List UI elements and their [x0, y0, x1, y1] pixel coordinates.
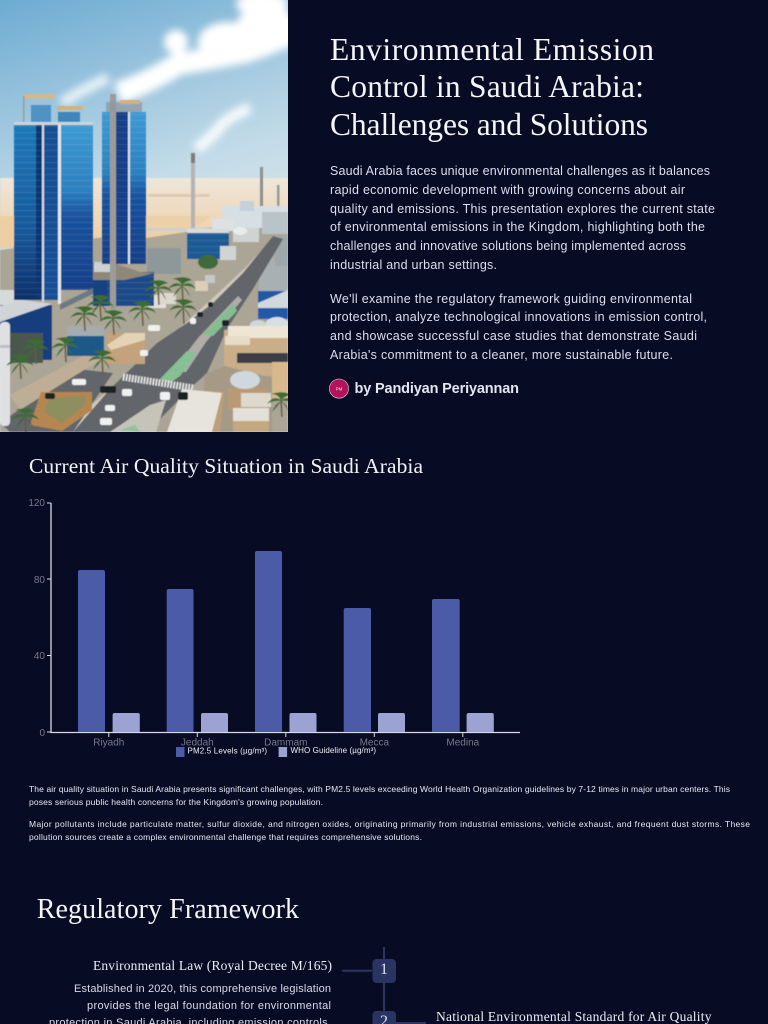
second paragraph: protection, analyze technological innovations in emission control, — [330, 310, 707, 324]
section heading: regulatory framework: Regulatory Framework — [37, 894, 299, 925]
step 1 text: Established in 2020, this comprehensive legislation — [74, 983, 331, 995]
step 2 heading: National Environmental Standard for Air Quality — [436, 1009, 712, 1024]
step 1 text: Environmental Law (Royal Decree M/165) — [93, 958, 332, 973]
intro paragraph: of environmental emissions in the Kingdom, highlighting both the — [330, 220, 705, 234]
cars — [72, 318, 196, 425]
beige service blocks by the road — [148, 295, 166, 308]
section heading: air quality: Current Air Quality Situation in Saudi Arabia — [29, 454, 423, 478]
towers — [31, 105, 51, 127]
bar chart: PM2.5 by city — [28, 498, 520, 757]
legend: WHO Guideline (µg/m³) — [290, 746, 376, 755]
intro paragraph: Saudi Arabia faces unique environmental challenges as it balances — [330, 164, 710, 178]
road system — [60, 240, 271, 432]
podium and lower buildings — [93, 262, 107, 306]
air quality description text: poses serious public health concerns for the Kingdom's growing population. — [29, 797, 323, 807]
intro paragraph: quality and emissions. This presentation explores the current state — [330, 202, 715, 216]
author badge: by Pandiyan Periyannan — [354, 381, 519, 397]
step 1 marker: 1 — [380, 961, 388, 978]
title: Environmental Emission — [330, 32, 654, 67]
second paragraph: Arabia's commitment to a cleaner, more sustainable future. — [330, 348, 673, 362]
second paragraph — [330, 292, 707, 362]
timeline — [49, 947, 712, 1024]
title — [330, 32, 654, 142]
hero photo: industrial city with glass towers and smokestacks — [0, 0, 300, 433]
y axis labels: 120 — [28, 498, 45, 509]
second paragraph: We'll examine the regulatory framework guiding environmental — [330, 292, 692, 306]
intro paragraph: rapid economic development with growing concerns about air — [330, 183, 685, 197]
timeline spine — [383, 947, 385, 1024]
palm trees — [6, 277, 295, 433]
y axis labels: 80 — [34, 575, 45, 586]
city labels — [93, 738, 480, 748]
air quality description text: Major pollutants include particulate matter, sulfur dioxide, and nitrogen oxides, originating primarily from industrial emissions, vehicle exhaust, and frequent dust storms. These — [29, 819, 750, 829]
step 2 marker — [372, 1011, 396, 1024]
city labels: Jeddah — [181, 738, 214, 748]
right side buildings — [258, 291, 288, 319]
WHO guideline bars — [113, 713, 494, 732]
air quality description text — [29, 784, 750, 842]
y axis labels — [28, 498, 45, 739]
city labels: Mecca — [360, 738, 389, 748]
step 1 text: provides the legal foundation for environmental — [87, 1000, 331, 1012]
city labels: Riyadh — [93, 738, 124, 748]
step 1 marker — [372, 959, 396, 983]
intro paragraph: industrial and urban settings. — [330, 258, 497, 272]
title: Control in Saudi Arabia: — [330, 69, 644, 104]
legend: PM2.5 Levels (µg/m³) — [188, 746, 267, 756]
ground — [0, 222, 288, 432]
y axis labels: 40 — [34, 651, 45, 662]
city labels: Medina — [446, 738, 480, 748]
intro paragraph — [330, 164, 715, 272]
second paragraph: and showcase successful case studies that demonstrate Saudi — [330, 329, 697, 343]
title: Challenges and Solutions — [330, 107, 648, 142]
legend — [176, 746, 376, 757]
y axis labels: 0 — [39, 728, 45, 739]
city labels: Dammam — [264, 738, 307, 748]
air quality description text: pollution sources create a complex environmental challenge that requires comprehensive solutions. — [29, 832, 422, 842]
PM2.5 bars — [78, 551, 460, 732]
intro paragraph: challenges and innovative solutions being implemented across — [330, 239, 686, 253]
author badge: PM — [336, 386, 343, 391]
step 1 text — [49, 958, 332, 1024]
air quality description text: The air quality situation in Saudi Arabia presents significant challenges, with PM2.5 levels exceeding World Health Organization guidelines by 7-12 times in major urban centers. This — [29, 784, 730, 794]
far plant — [191, 153, 195, 229]
